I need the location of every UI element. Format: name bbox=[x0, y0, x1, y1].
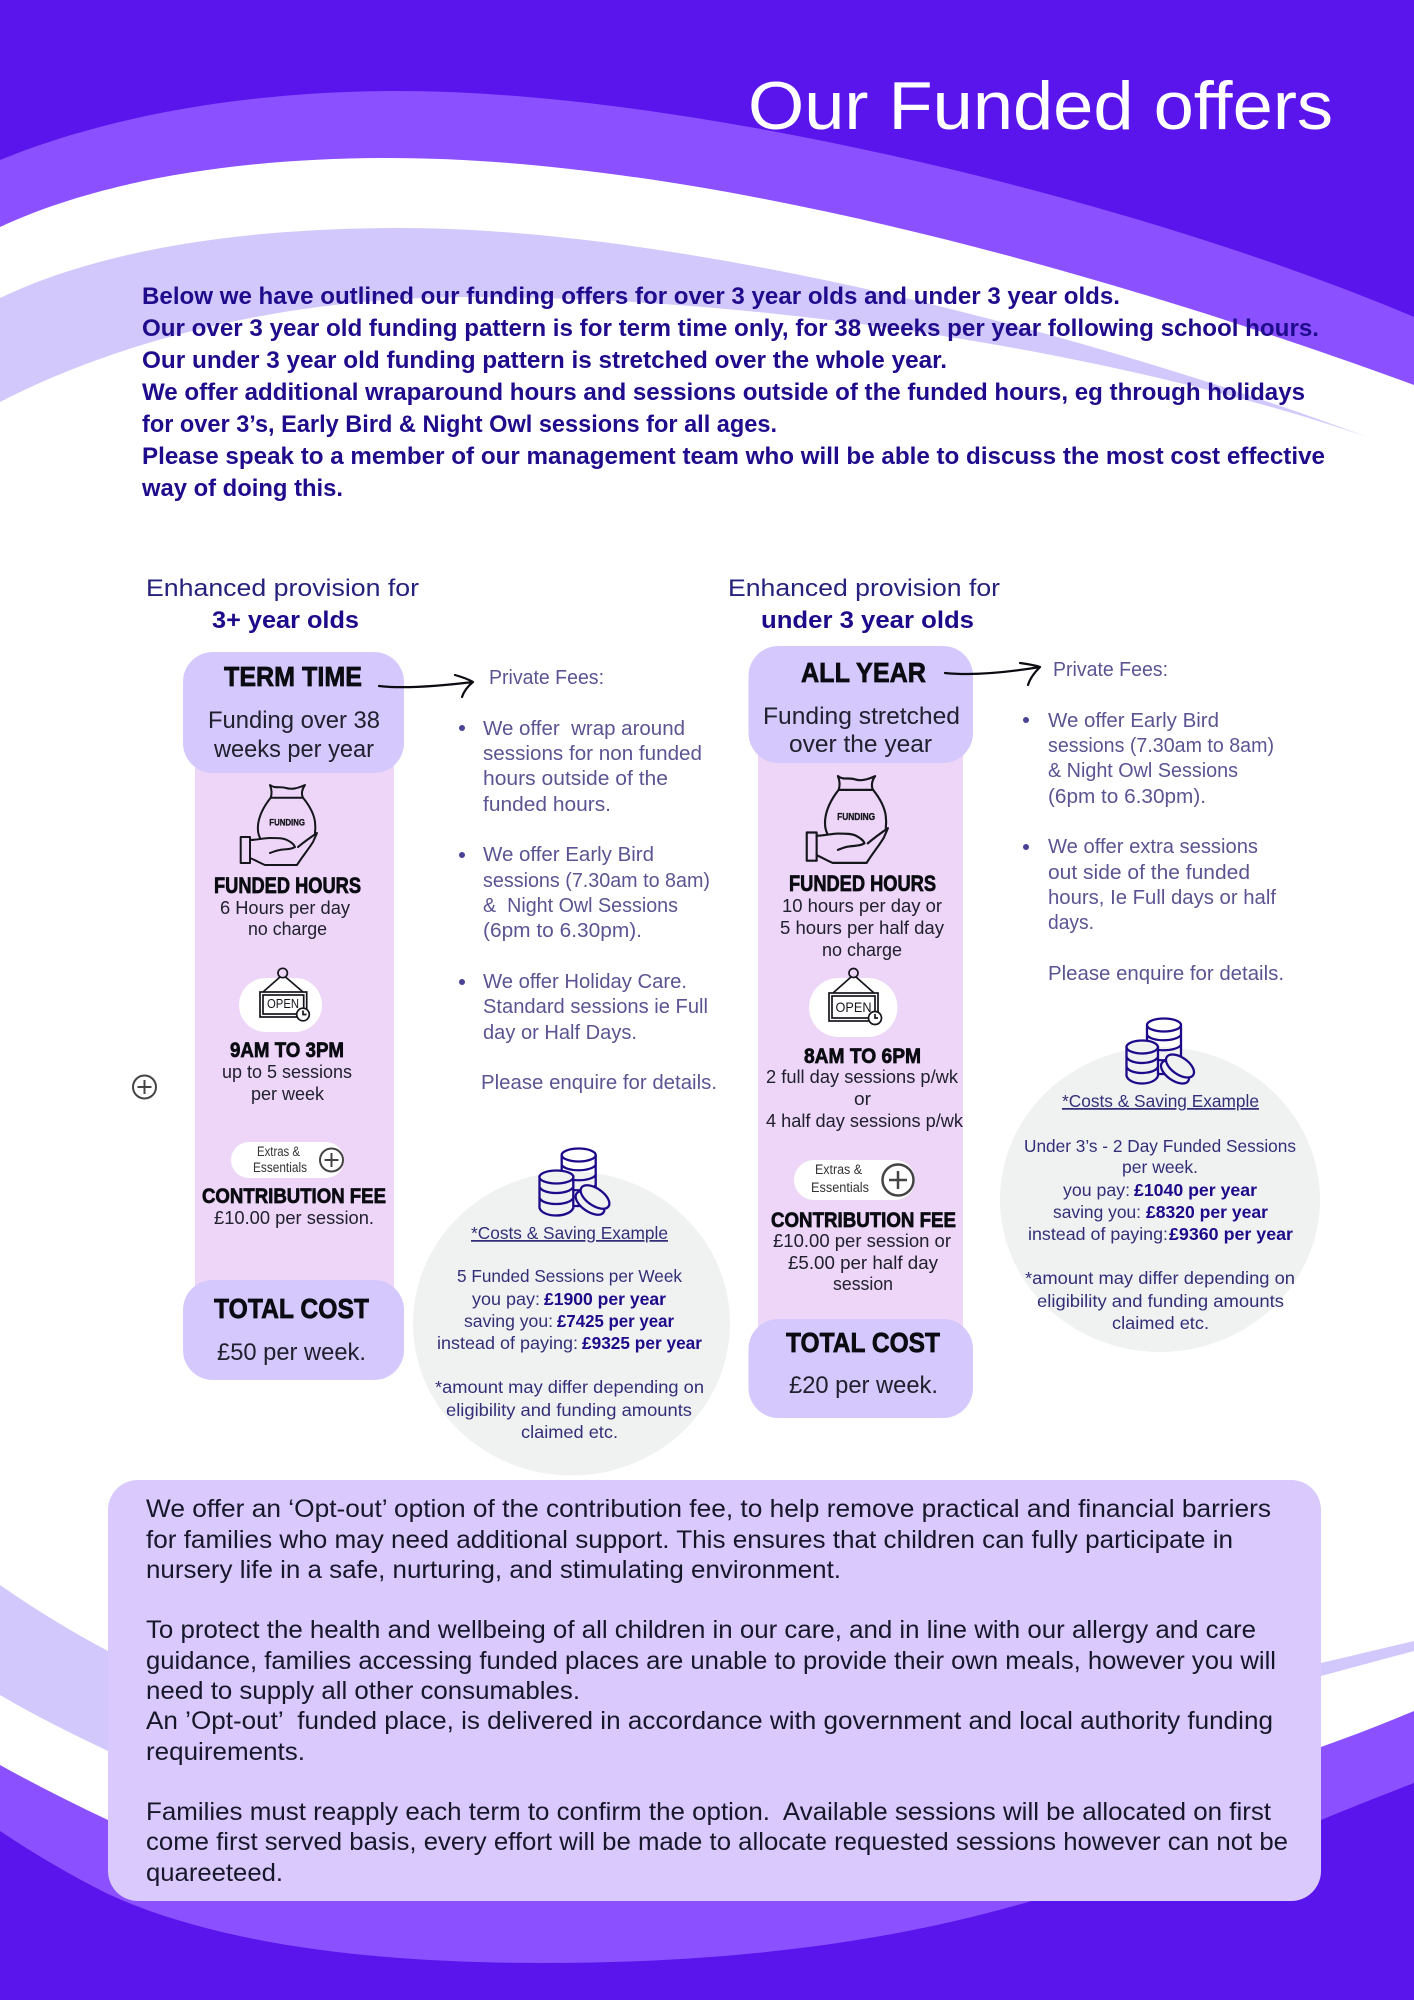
extras pill: Essentials bbox=[253, 1160, 307, 1175]
private fees list: 3+: sessions for non funded bbox=[483, 743, 702, 765]
cost example text: *Costs & Saving Example bbox=[471, 1223, 668, 1243]
hours 9am to 3pm: up to 5 sessions bbox=[222, 1062, 352, 1082]
private fees list: under 3: Please enquire for details. bbox=[1048, 963, 1284, 985]
cost example text: instead of paying: bbox=[1028, 1224, 1168, 1244]
icon: coins bbox=[1126, 1018, 1198, 1088]
extras pill bbox=[794, 1160, 915, 1200]
private fees list: 3+: & Night Owl Sessions bbox=[483, 895, 678, 917]
private fees list: 3+ bbox=[459, 667, 717, 1094]
contribution fee bbox=[771, 1209, 956, 1294]
icon: open sign: OPEN bbox=[836, 999, 872, 1015]
hours 8am to 6pm: or bbox=[854, 1089, 871, 1109]
cost example text: £8320 per year bbox=[1146, 1202, 1268, 1222]
paragraph: opt-out option bbox=[146, 1495, 1271, 1584]
panel: term time column bbox=[183, 652, 404, 1380]
extras pill bbox=[231, 1142, 344, 1178]
icon: funding bag in hand: FUNDING bbox=[837, 812, 875, 823]
cost example text: eligibility and funding amounts bbox=[446, 1400, 692, 1420]
heading: under 3 year olds: Enhanced provision for bbox=[728, 575, 1000, 602]
icon: funding bag in hand: FUNDING bbox=[269, 818, 305, 828]
paragraph: reapply each term: Families must reapply each term to confirm the option. Available sessions will be allocated on first bbox=[146, 1798, 1271, 1826]
paragraph: health and wellbeing: requirements. bbox=[146, 1738, 305, 1766]
cost example text: claimed etc. bbox=[521, 1422, 618, 1442]
contribution fee: session bbox=[833, 1274, 893, 1294]
cost example text: £9360 per year bbox=[1169, 1224, 1293, 1244]
total cost: £50 per week. bbox=[217, 1339, 366, 1366]
private fees list: under 3: sessions (7.30am to 8am) bbox=[1048, 735, 1274, 757]
paragraph: opt-out option: We offer an ‘Opt-out’ option of the contribution fee, to help remove practical and financial barriers bbox=[146, 1495, 1271, 1523]
private fees list: under 3: Private Fees: bbox=[1053, 659, 1168, 681]
all year header bbox=[748, 646, 973, 763]
paragraph: health and wellbeing: need to supply all other consumables. bbox=[146, 1677, 580, 1705]
hours 8am to 6pm: 2 full day sessions p/wk bbox=[766, 1067, 959, 1087]
heading: 3+ year olds: Enhanced provision for bbox=[146, 575, 419, 602]
extras pill: Extras & bbox=[257, 1144, 300, 1159]
private fees list: under 3: hours, Ie Full days or half bbox=[1048, 887, 1276, 909]
cost example text: eligibility and funding amounts bbox=[1037, 1291, 1284, 1311]
private fees list: under 3 bbox=[1023, 659, 1284, 985]
total cost: TOTAL COST bbox=[786, 1327, 940, 1358]
cost example text: *amount may differ depending on bbox=[1025, 1268, 1295, 1288]
cost example text: Under 3’s - 2 Day Funded Sessions bbox=[1024, 1136, 1296, 1156]
cost example text: £7425 per year bbox=[557, 1311, 674, 1331]
contribution fee: CONTRIBUTION FEE bbox=[771, 1209, 956, 1232]
cost example text: instead of paying: bbox=[437, 1333, 578, 1353]
arrow: term time to private fees bbox=[379, 675, 473, 697]
icon: funding bag in hand bbox=[241, 785, 317, 865]
paragraph: reapply each term: come first served basis, every effort will be made to allocate requested sessions however can not be bbox=[146, 1828, 1288, 1856]
cost example text: *Costs & Saving Example bbox=[1062, 1091, 1259, 1111]
contribution fee bbox=[202, 1185, 386, 1228]
private fees list: 3+: funded hours. bbox=[483, 794, 611, 816]
hours 9am to 3pm: 9AM TO 3PM bbox=[230, 1039, 344, 1062]
icon: open sign bbox=[239, 968, 322, 1032]
heading: 3+ year olds bbox=[146, 575, 419, 634]
funded hours: FUNDED HOURS bbox=[789, 871, 936, 896]
cost example text: saving you: bbox=[464, 1311, 553, 1331]
cost example text: claimed etc. bbox=[1112, 1313, 1209, 1333]
hours 8am to 6pm bbox=[766, 1045, 964, 1131]
term time header: TERM TIME bbox=[224, 661, 362, 692]
total cost bbox=[748, 1319, 973, 1418]
funded hours: no charge bbox=[248, 919, 327, 939]
total cost: TOTAL COST bbox=[214, 1293, 369, 1324]
paragraph: reapply each term bbox=[146, 1798, 1288, 1887]
icon: funding bag in hand bbox=[807, 776, 888, 863]
funded hours: no charge bbox=[822, 940, 902, 960]
funded hours: 6 Hours per day bbox=[220, 898, 350, 918]
total cost bbox=[183, 1280, 404, 1380]
paragraph: health and wellbeing bbox=[146, 1616, 1276, 1766]
intro text block: Please speak to a member of our management team who will be able to discuss the most cost effective bbox=[142, 443, 1325, 470]
icon: open sign: OPEN bbox=[267, 996, 299, 1011]
cost example text: £1900 per year bbox=[544, 1289, 666, 1309]
heading: 3+ year olds: 3+ year olds bbox=[212, 607, 359, 634]
all year header: over the year bbox=[789, 731, 932, 758]
term time header bbox=[183, 652, 404, 773]
hours 9am to 3pm: per week bbox=[251, 1084, 325, 1104]
intro text block: Below we have outlined our funding offers for over 3 year olds and under 3 year olds. bbox=[142, 283, 1120, 310]
paragraph: health and wellbeing: To protect the health and wellbeing of all children in our care, and in line with our allergy and care bbox=[146, 1616, 1256, 1644]
private fees list: 3+: Private Fees: bbox=[489, 667, 604, 689]
paragraph: health and wellbeing: guidance, families accessing funded places are unable to provide their own meals, however you will bbox=[146, 1647, 1276, 1675]
private fees list: under 3: (6pm to 6.30pm). bbox=[1048, 786, 1206, 808]
panel: all year column bbox=[748, 646, 973, 1418]
cost example text: saving you: bbox=[1053, 1202, 1141, 1222]
icon: coins bbox=[539, 1148, 613, 1219]
cost example text: you pay: bbox=[1063, 1180, 1130, 1200]
paragraph: opt-out option: for families who may need additional support. This ensures that children can fully participate in bbox=[146, 1526, 1233, 1554]
funded hours: 5 hours per half day bbox=[780, 918, 944, 938]
hours 9am to 3pm bbox=[222, 1039, 352, 1104]
private fees list: under 3: out side of the funded bbox=[1048, 862, 1250, 884]
private fees list: under 3: & Night Owl Sessions bbox=[1048, 760, 1238, 782]
arrow: all year to private fees bbox=[945, 663, 1040, 685]
private fees list: 3+: (6pm to 6.30pm). bbox=[483, 920, 642, 942]
cost example text: £1040 per year bbox=[1134, 1180, 1257, 1200]
icon: open sign bbox=[809, 968, 898, 1037]
funded hours: FUNDED HOURS bbox=[214, 873, 361, 898]
intro text block: Our over 3 year old funding pattern is for term time only, for 38 weeks per year following school hours. bbox=[142, 315, 1319, 342]
cost example text: per week. bbox=[1122, 1157, 1198, 1177]
all year header: ALL YEAR bbox=[801, 657, 926, 688]
intro text block: We offer additional wraparound hours and sessions outside of the funded hours, eg through holidays bbox=[142, 379, 1305, 406]
panel: costs and saving example 3+ bbox=[413, 1148, 730, 1476]
hours 8am to 6pm: 8AM TO 6PM bbox=[804, 1045, 921, 1068]
hours 8am to 6pm: 4 half day sessions p/wk bbox=[766, 1111, 964, 1131]
extras pill: Essentials bbox=[811, 1180, 869, 1195]
heading: under 3 year olds: under 3 year olds bbox=[761, 607, 974, 634]
cost example text: 5 Funded Sessions per Week bbox=[457, 1266, 682, 1286]
panel: opt-out information bbox=[108, 1480, 1321, 1901]
cost example text: £9325 per year bbox=[582, 1333, 702, 1353]
contribution fee: £10.00 per session. bbox=[214, 1208, 374, 1228]
intro text block bbox=[141, 283, 1325, 502]
paragraph: reapply each term: quareeteed. bbox=[146, 1859, 283, 1887]
private fees list: under 3: We offer Early Bird bbox=[1048, 710, 1219, 732]
intro text block: Our under 3 year old funding pattern is stretched over the whole year. bbox=[142, 347, 947, 374]
contribution fee: CONTRIBUTION FEE bbox=[202, 1185, 386, 1208]
funded hours bbox=[214, 873, 361, 939]
intro text block: for over 3’s, Early Bird & Night Owl sessions for all ages. bbox=[142, 411, 777, 438]
private fees list: 3+: Standard sessions ie Full bbox=[483, 996, 708, 1018]
extras pill: Extras & bbox=[815, 1162, 862, 1177]
private fees list: 3+: We offer Holiday Care. bbox=[483, 971, 687, 993]
private fees list: 3+: We offer Early Bird bbox=[483, 844, 654, 866]
cost example text bbox=[1024, 1091, 1296, 1333]
intro text block: way of doing this. bbox=[141, 475, 343, 502]
private fees list: 3+: We offer wrap around bbox=[483, 718, 685, 740]
private fees list: under 3: days. bbox=[1048, 912, 1094, 934]
panel: costs and saving example under 3 bbox=[1000, 1018, 1320, 1352]
cost example text: *amount may differ depending on bbox=[435, 1377, 704, 1397]
cost example text: you pay: bbox=[472, 1289, 540, 1309]
private fees list: 3+: Please enquire for details. bbox=[481, 1072, 717, 1094]
all year header: Funding stretched bbox=[763, 703, 960, 730]
term time header: Funding over 38 bbox=[208, 707, 380, 734]
private fees list: under 3: We offer extra sessions bbox=[1048, 836, 1258, 858]
heading: under 3 year olds bbox=[728, 575, 1000, 634]
total cost: £20 per week. bbox=[789, 1372, 938, 1399]
title: Our Funded offers bbox=[748, 68, 1333, 144]
cost example text bbox=[435, 1223, 704, 1442]
icon: plus outside column bbox=[133, 1076, 156, 1098]
private fees list: 3+: hours outside of the bbox=[483, 768, 668, 790]
contribution fee: £10.00 per session or bbox=[773, 1231, 951, 1251]
paragraph: opt-out option: nursery life in a safe, nurturing, and stimulating environment. bbox=[146, 1556, 841, 1584]
funded hours bbox=[780, 871, 944, 960]
paragraph: health and wellbeing: An ’Opt-out’ funded place, is delivered in accordance with government and local authority funding bbox=[146, 1707, 1273, 1735]
funded hours: 10 hours per day or bbox=[782, 896, 942, 916]
private fees list: 3+: sessions (7.30am to 8am) bbox=[483, 870, 710, 892]
contribution fee: £5.00 per half day bbox=[788, 1253, 938, 1273]
private fees list: 3+: day or Half Days. bbox=[483, 1022, 637, 1044]
term time header: weeks per year bbox=[213, 736, 374, 763]
